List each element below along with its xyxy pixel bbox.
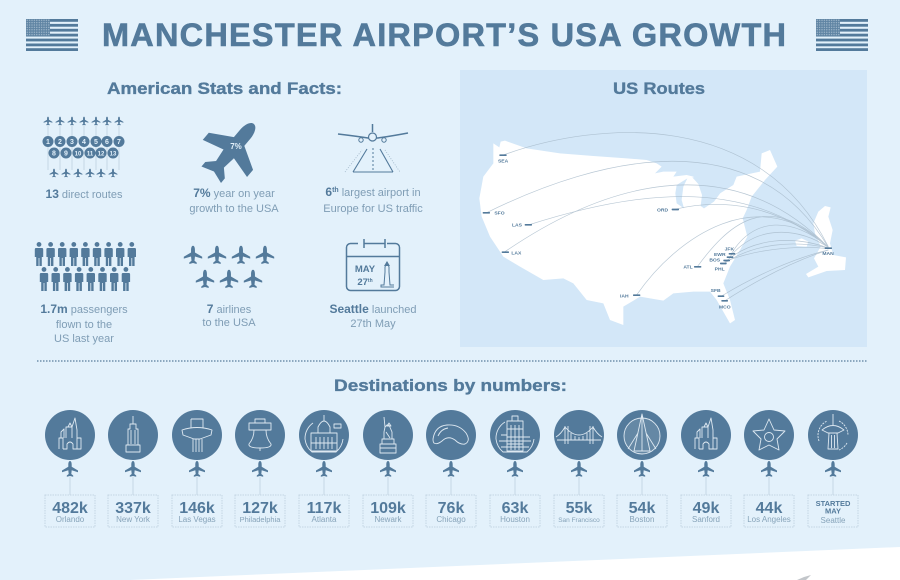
destination: Sanford: 49k [693,500,719,517]
icon: Liberty Bell [249,419,271,451]
airport labels: SFO [494,211,505,217]
destination: Philadelphia: Philadelphia [240,515,281,524]
heading: American Stats and Facts: American Stats and Facts: [107,79,342,98]
airport labels: JFK [725,246,734,252]
destination: Houston: 63k [502,500,528,517]
icon: route network [42,117,124,177]
caption: largest airport in [339,187,421,199]
destination: Newark [363,410,413,527]
stat: 1.7m passengers [35,242,136,345]
icon: Cloud Gate bean [433,425,468,444]
icon: castle [695,418,717,449]
stat: 7 airlines: to the USA [202,317,256,329]
stat: 13 direct routes: 13 [110,152,117,158]
stat: 13 direct routes: 6 [105,139,109,146]
destination: Boston: Boston [630,515,654,524]
airport labels: MCO [719,305,731,311]
stat: 1.7m passengers: flown to the [56,319,112,331]
icon: castle [59,418,81,449]
divider [37,360,868,362]
destination: Boston [617,410,667,527]
destination: Chicago [426,410,476,527]
panel: US Routes [460,70,867,347]
stat: 7% growth [189,105,279,215]
white footer wedge [130,547,900,580]
airport labels: SEA [498,159,509,165]
USA landmass [479,141,777,325]
destination: Seattle: MAY [825,506,841,516]
stat: 13 direct routes: 10 [75,152,82,158]
Ireland [795,238,808,247]
caption: Seattle launched [329,302,417,316]
stat: 7 airlines [184,246,274,329]
caption: 7% year on year [193,186,275,200]
footer logo [797,575,811,580]
destination: Seattle [808,410,858,527]
icon: Vegas sign [182,419,212,452]
destination: Newark: Newark [374,515,403,524]
destination: Las Vegas: Las Vegas [178,515,216,524]
caption: 1.7m passengers [40,302,128,316]
flight arcs [487,133,828,301]
stat: Seattle launched [329,239,417,330]
destination: Atlanta: Atlanta [312,515,337,524]
icon: large plane [189,105,276,193]
destination: New York: New York [116,515,151,524]
destination: Boston: 54k [629,500,655,517]
airport labels: LAX [511,250,522,256]
destination: Houston: Houston [500,515,530,524]
destination: Chicago: Chicago [436,515,466,524]
route map [479,133,846,325]
destination: Los Angeles: 44k [756,500,782,517]
stat: 13 direct routes: 2 [58,139,62,146]
icon: Hollywood star [753,419,785,450]
icon: plane over runway [338,124,408,172]
stat: 13 direct routes: 11 [87,152,94,158]
icon: calendar: MAY [355,264,376,275]
icon: Statue of Liberty [380,417,396,453]
icon: calendar [346,239,400,290]
destination: Atlanta [299,410,349,527]
airport labels: IAH [620,293,629,299]
stat: 6th largest [323,124,423,215]
heading: US Routes: US Routes [613,79,705,98]
airport labels: LAS [512,223,523,229]
airport labels: SFB [711,288,721,294]
destination: Philadelphia: 127k [242,500,278,517]
stat: 13 direct routes: 3 [70,139,74,146]
stat: 13 direct routes: 9 [64,150,68,158]
caption: 7 airlines [207,302,252,316]
icon: Boston monument [624,414,660,454]
caption: th [332,187,339,194]
airport markers [483,154,832,302]
destination: Seattle: STARTED [816,499,851,508]
icon: calendar: 27 [357,277,368,288]
destination: Seattle: Seattle [821,516,846,525]
destination: San Francisco: San Francisco [558,517,600,524]
destination: Atlanta: 117k [307,500,341,517]
icon: Empire State [126,416,140,452]
icon: Houston skyline [496,416,534,452]
destination: Chicago: 76k [438,500,464,517]
stat: 7% growth: growth to the USA [189,203,279,215]
destination: Sanford [681,410,731,527]
airport labels: ATL [683,265,693,271]
stat: 13 direct routes: 4 [82,139,86,146]
airport labels: BOS [709,258,721,264]
plane percent label: 7% [230,142,242,151]
destination: Orlando: Orlando [56,515,85,524]
airport labels: EWR [714,252,726,258]
Great Britain [806,206,846,277]
icon: capitol [305,415,343,452]
destination: Orlando [45,410,95,527]
destination: Sanford: Sanford [692,515,720,524]
heading: Destinations by numbers: Destinations by numbers: [334,376,567,395]
airport labels: ORD [657,207,668,213]
stat: 13 direct routes: 7 [117,139,121,146]
stat: 6th largest: Europe for US traffic [323,203,423,215]
caption: 6 [325,185,332,199]
icon: people [35,242,136,291]
destination: New York: 337k [115,500,151,517]
icon: calendar: th [368,278,373,284]
destination: Orlando: 482k [52,500,88,517]
flag: left [26,19,78,51]
airport labels: MAN [822,251,834,257]
destination: Las Vegas: 146k [179,500,215,517]
airport labels [494,159,834,311]
stat: 13 direct routes: 5 [94,139,98,146]
stat: Seattle launched: 27th May [350,318,396,330]
destination: Philadelphia [235,410,285,527]
destination: San Francisco: 55k [566,500,592,517]
great lakes [675,177,721,208]
stat: 13 direct routes: 1 [46,139,50,146]
stat: 13 direct routes: 12 [98,152,105,158]
flag: right [816,19,868,51]
icon: seven planes [184,246,274,288]
caption: 13 direct routes [46,187,123,201]
icon: Golden Gate Bridge [556,426,602,444]
icon: Space Needle [818,414,848,450]
stat: 1.7m passengers: US last year [54,333,114,345]
destination: Los Angeles: Los Angeles [747,515,791,524]
title: MANCHESTER AIRPORT’S USA GROWTH [102,17,786,53]
destination: Los Angeles [744,410,794,527]
destination: Las Vegas [172,410,222,527]
destination: San Francisco [554,410,604,527]
destination: Newark: 109k [370,500,406,517]
stat: 13 direct routes [42,117,124,201]
destination: New York [108,410,158,527]
stat: 13 direct routes: 8 [52,150,56,158]
destination: Houston [490,410,540,527]
airport labels: PHL [715,266,725,272]
